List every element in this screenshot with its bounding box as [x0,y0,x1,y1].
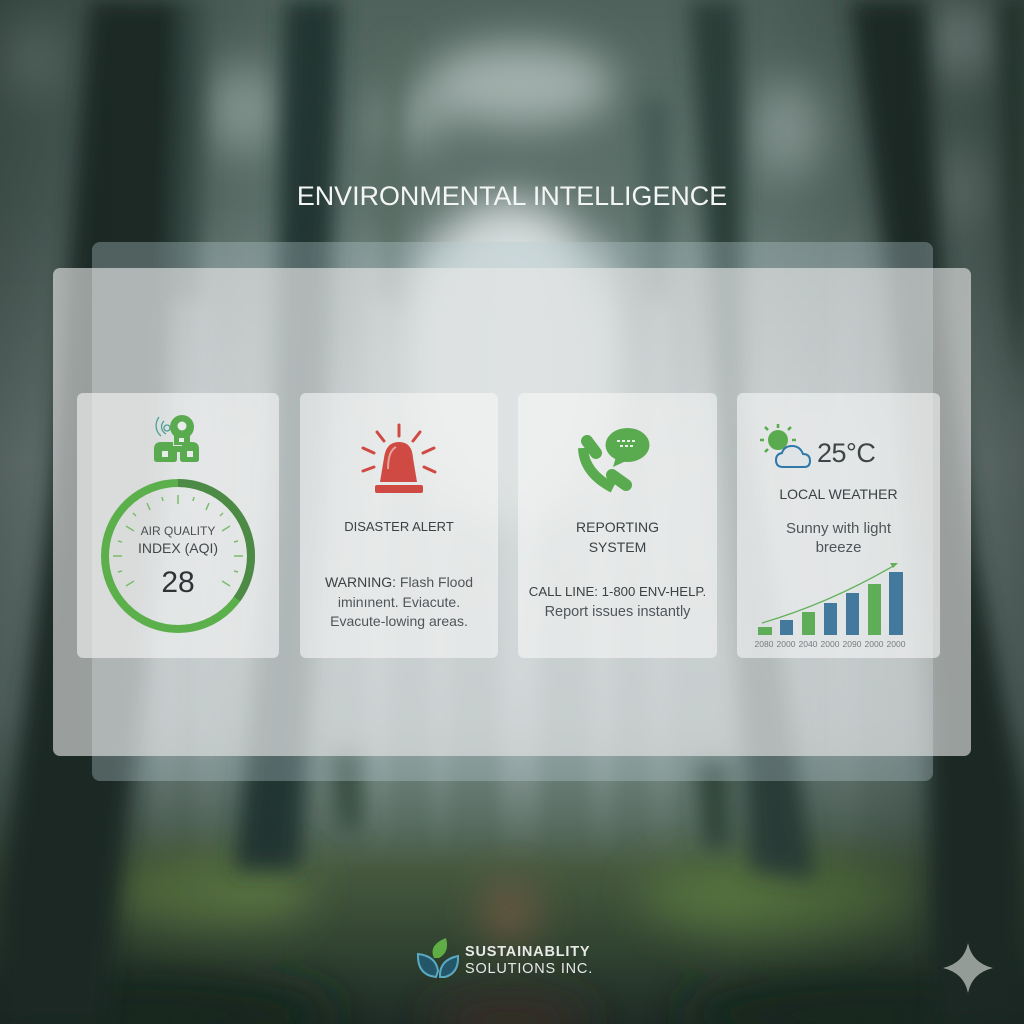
icon: phone with speech bubble [578,428,650,492]
card: local weather [737,393,940,658]
value: AQI 28: 28 [161,566,195,599]
value: 25 degrees: 25°C [817,438,875,468]
text: conditions [786,520,891,556]
chart: rising bars: 2000 [777,639,796,649]
text: company name: SOLUTIONS INC. [465,960,593,976]
card: reporting system [518,393,717,658]
text: call line [529,584,706,620]
text: warning message: WARNING: Flash Flood [325,574,473,590]
chart: rising bars: 2040 [799,639,818,649]
chart: rising bars: 2090 [843,639,862,649]
title: ENVIRONMENTAL INTELLIGENCE [297,181,727,211]
text: call line: CALL LINE: 1-800 ENV-HELP. [529,584,706,599]
icon: four-point sparkle [943,943,993,993]
chart: rising bars [754,563,906,649]
panel: back glass layer [92,242,933,781]
card: air quality index: INDEX (AQI) [138,540,218,556]
text: conditions: breeze [816,539,861,556]
heading: reporting system: SYSTEM [589,539,646,555]
card: air quality index [77,393,279,658]
chart: rising bars: 2000 [865,639,884,649]
heading: disaster alert: DISASTER ALERT [344,519,454,534]
chart: rising bars: 2000 [821,639,840,649]
text: company name: SUSTAINABLITY [465,944,590,960]
gauge: AQI dial [101,479,255,633]
chart: rising bars: 2000 [887,639,906,649]
icon: air quality sensor [154,415,199,462]
panel: front glass layer [53,268,971,756]
chart: rising bars: 2080 [755,639,774,649]
heading: local weather: LOCAL WEATHER [779,486,898,502]
heading: reporting system [576,519,659,555]
text: warning message [325,574,473,629]
text: conditions: Sunny with light [786,520,891,537]
card: disaster alert [300,393,498,658]
heading: reporting system: REPORTING [576,519,659,535]
text: warning message: iminınent. Eviacute. [338,594,460,610]
icon: red siren [362,424,436,493]
text: warning message: Evacute-lowing areas. [330,613,468,629]
label: air quality index: AIR QUALITY [141,524,215,538]
icon: leaves [417,938,459,978]
text: call line: Report issues instantly [545,604,690,620]
icon: sun and cloud [760,424,811,468]
text: company name [465,944,593,976]
logo: sustainability solutions [417,938,593,978]
